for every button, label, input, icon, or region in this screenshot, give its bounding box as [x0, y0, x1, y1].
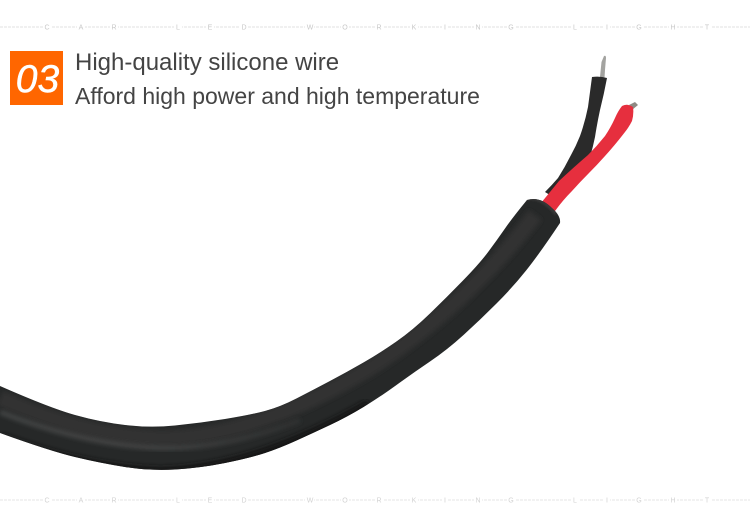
bottom carled lighting ruler: G: [636, 498, 642, 504]
bottom carled lighting ruler: K: [412, 498, 417, 504]
top carled lighting ruler: A: [79, 24, 84, 32]
red inner wire: [541, 105, 633, 211]
bottom carled lighting ruler: H: [670, 498, 676, 504]
top carled lighting ruler: L: [573, 24, 577, 32]
top carled lighting ruler: C: [44, 24, 50, 32]
top carled lighting ruler: R: [376, 24, 382, 32]
top carled lighting ruler: I: [606, 24, 608, 32]
top carled lighting ruler: T: [705, 24, 710, 32]
bottom carled lighting ruler: R: [111, 498, 117, 504]
bottom carled lighting ruler: A: [79, 498, 84, 504]
outer jacket: [0, 199, 560, 470]
bottom carled lighting ruler: N: [475, 498, 481, 504]
black wire metal tip: [600, 56, 606, 78]
top carled lighting ruler: [0, 22, 750, 32]
bottom carled lighting ruler: O: [342, 498, 348, 504]
bottom carled lighting ruler: R: [376, 498, 382, 504]
jacket shading: [0, 198, 556, 474]
cable illustration: [0, 56, 638, 474]
bottom carled lighting ruler: T: [705, 498, 710, 504]
top carled lighting ruler: R: [111, 24, 117, 32]
heading: High-quality silicone wire: [75, 49, 339, 76]
top carled lighting ruler: E: [208, 24, 213, 32]
number badge: 03: [16, 58, 59, 101]
bottom carled lighting ruler: D: [241, 498, 247, 504]
bottom carled lighting ruler: C: [44, 498, 50, 504]
bottom carled lighting ruler: [0, 495, 750, 505]
top carled lighting ruler: W: [307, 24, 314, 32]
bottom carled lighting ruler: E: [208, 498, 213, 504]
top carled lighting ruler: N: [475, 24, 481, 32]
bottom carled lighting ruler: G: [508, 498, 514, 504]
top carled lighting ruler: G: [636, 24, 642, 32]
bottom carled lighting ruler: I: [606, 498, 608, 504]
top carled lighting ruler: I: [444, 24, 446, 32]
top carled lighting ruler: H: [670, 24, 676, 32]
number badge: [10, 51, 63, 105]
bottom carled lighting ruler: W: [307, 498, 314, 504]
red wire metal tip: [629, 102, 638, 110]
bottom carled lighting ruler: L: [176, 498, 180, 504]
top carled lighting ruler: K: [412, 24, 417, 32]
top carled lighting ruler: G: [508, 24, 514, 32]
bottom carled lighting ruler: L: [573, 498, 577, 504]
top carled lighting ruler: O: [342, 24, 348, 32]
bottom carled lighting ruler: I: [444, 498, 446, 504]
subheading: Afford high power and high temperature: [75, 83, 480, 109]
top carled lighting ruler: D: [241, 24, 247, 32]
top carled lighting ruler: L: [176, 24, 180, 32]
black inner wire: [545, 77, 607, 200]
